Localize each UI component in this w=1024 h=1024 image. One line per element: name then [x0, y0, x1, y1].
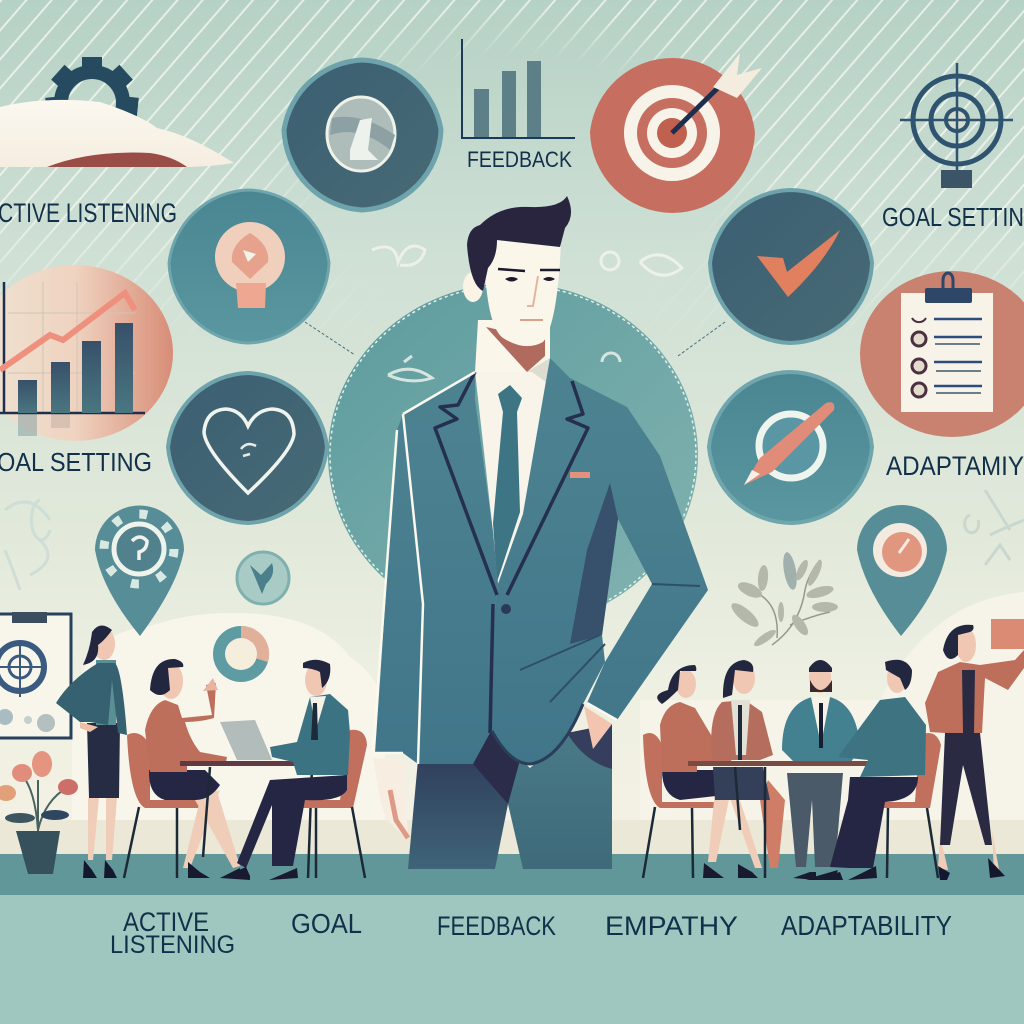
presenting woman [925, 625, 1024, 880]
button [501, 604, 511, 614]
scene: right meeting [643, 619, 1024, 880]
icon: heart on dark badge [168, 373, 327, 523]
label: active listening top: CTIVE LISTENING [0, 198, 177, 228]
icon: crosshair target [900, 63, 1013, 188]
bearded man [782, 660, 860, 880]
chair: man 2 [863, 733, 941, 878]
label: empathy: EMPATHY [605, 911, 738, 941]
icon: location pin [857, 505, 947, 636]
tie [493, 385, 522, 582]
icon: gear over cloud [0, 57, 234, 167]
jacket creases and lapels [435, 372, 700, 764]
label: adaptability: ADAPTABILITY [781, 910, 952, 941]
ear [463, 272, 483, 302]
laptop [220, 720, 272, 760]
sign [991, 619, 1024, 649]
seated man [220, 660, 350, 880]
icon: idea on teal badge [169, 190, 329, 343]
label: feedback top: FEEDBACK [467, 147, 572, 172]
face [484, 225, 561, 346]
jacket shading [570, 483, 618, 644]
chair: woman 1 [643, 733, 723, 878]
trousers [408, 760, 508, 869]
label: active: ACTIVE [123, 907, 209, 937]
woman 1 [657, 665, 762, 878]
jacket left panel [375, 372, 498, 764]
decorative faint doodles [5, 246, 1024, 590]
scene: left meeting [0, 612, 367, 880]
shirt [475, 358, 550, 584]
facial features [498, 269, 560, 320]
connector dashes [305, 322, 725, 356]
icon: leaf sprig [728, 551, 838, 649]
left hand [373, 758, 408, 838]
icon: target with arrow [590, 53, 762, 213]
label: goal: GOAL [291, 908, 362, 939]
table: right [688, 761, 887, 878]
pocket hand [584, 706, 612, 749]
icon: dark badge with lens [284, 60, 441, 210]
icon: gear pin [95, 506, 184, 636]
icon: clipboard on red circle [860, 271, 1024, 437]
board with target [0, 612, 71, 738]
pie icon [213, 626, 269, 682]
table: left [180, 761, 333, 878]
large teal circle behind figure [328, 283, 698, 627]
chart: rising trend in circle [0, 265, 173, 441]
chair: left [124, 733, 213, 878]
chair: right [290, 730, 367, 878]
woman 2 [711, 660, 785, 868]
seated woman [145, 659, 240, 878]
hair [467, 196, 571, 291]
label: feedback: FEEDBACK [437, 911, 556, 941]
standing woman [56, 625, 127, 878]
floor band [0, 854, 1024, 1024]
neck [475, 320, 550, 385]
jacket right panel [492, 358, 708, 764]
label: listening: LISTENING [110, 931, 235, 959]
label: goal setting left: OAL SETTING [0, 447, 152, 477]
jacket white outlines [373, 372, 617, 764]
bottom labels [110, 907, 952, 959]
man 2 [806, 660, 926, 880]
icon: pen on teal badge [709, 372, 872, 523]
bar chart: top center [462, 39, 575, 138]
plant [0, 751, 78, 874]
icon: small leaf circle [237, 552, 289, 604]
pocket square [570, 472, 590, 478]
icon: check on dark badge [710, 190, 872, 343]
main figure: businessman [373, 196, 708, 869]
